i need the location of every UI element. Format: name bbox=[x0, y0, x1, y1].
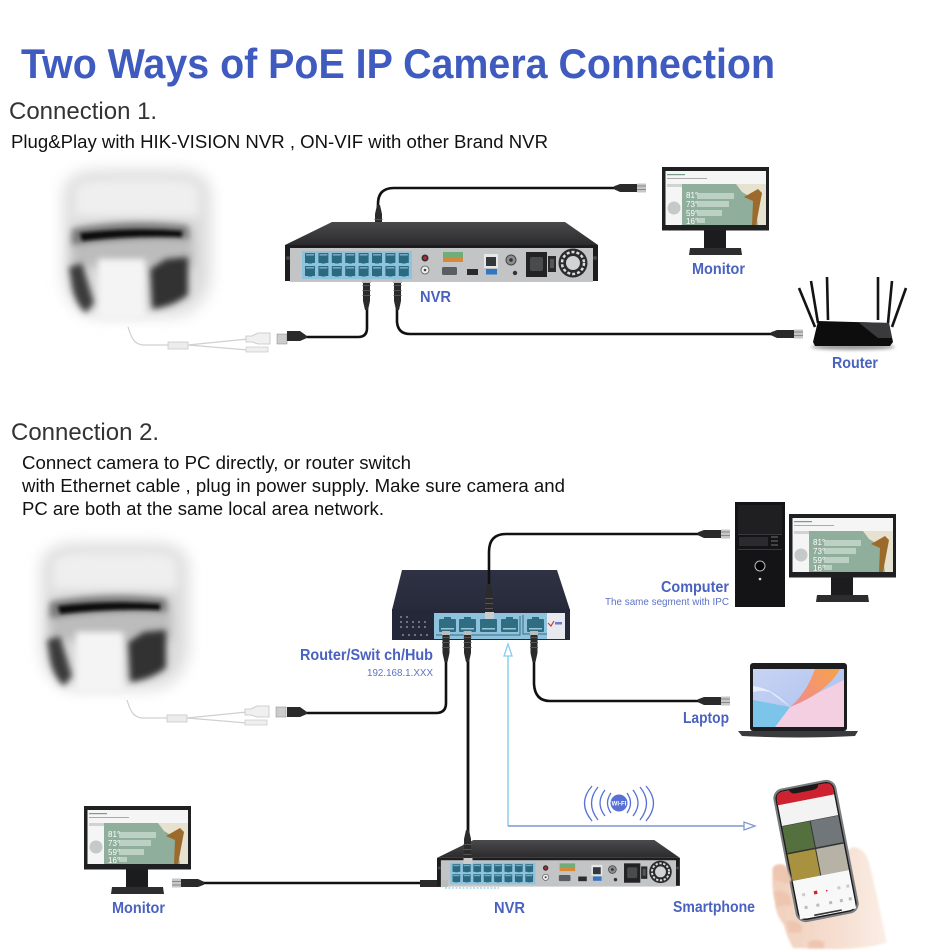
icon: laptop bbox=[738, 663, 858, 738]
cable: NVR to router bbox=[393, 279, 803, 338]
device: switch bbox=[392, 570, 570, 640]
label: laptop: Laptop bbox=[683, 710, 729, 727]
cable plug into NVR 2 bbox=[442, 830, 499, 888]
icon: hand holding smartphone bbox=[772, 778, 887, 949]
cable: switch to laptop bbox=[530, 631, 730, 706]
monitor: computer: 16° bbox=[813, 564, 825, 573]
pigtail cable 2 bbox=[127, 700, 307, 725]
label: router switch hub: 192.168.1.XXX bbox=[367, 667, 433, 679]
heading: connection 2: Connection 2. bbox=[11, 419, 159, 446]
monitor 3 bbox=[84, 806, 191, 894]
monitor 1 bbox=[662, 167, 769, 255]
monitor 3: 81° bbox=[108, 830, 120, 839]
text: connection 2 description bbox=[21, 452, 565, 519]
text: connection 2 description: PC are both at the same local area network. bbox=[22, 498, 384, 519]
cable: camera to switch bbox=[307, 631, 450, 713]
title: Two Ways of PoE IP Camera Connection bbox=[21, 40, 775, 87]
icon: computer tower bbox=[735, 502, 785, 607]
label: router switch hub: Router/Swit ch/Hub bbox=[300, 647, 433, 664]
icon: smartphone bbox=[772, 778, 860, 924]
camera 2 bbox=[42, 544, 188, 692]
pigtail cable 1 bbox=[128, 327, 307, 352]
camera 1 bbox=[64, 171, 210, 319]
label: NVR 2: NVR bbox=[494, 900, 525, 917]
monitor 3: 73° bbox=[108, 839, 120, 848]
arrow: wifi link from switch to smartphone bbox=[504, 644, 755, 830]
icon: router bbox=[799, 277, 906, 350]
monitor 1: 73° bbox=[686, 200, 698, 209]
label: computer: The same segment with IPC bbox=[605, 596, 729, 608]
monitor 3: 59° bbox=[108, 848, 120, 857]
cable: NVR to monitor 3 bbox=[172, 878, 441, 888]
label: computer: Computer bbox=[661, 579, 729, 596]
cable: camera to NVR bbox=[307, 279, 371, 337]
monitor 1: 59° bbox=[686, 209, 698, 218]
label: monitor 3: Monitor bbox=[112, 900, 165, 917]
monitor 1: 81° bbox=[686, 191, 698, 200]
label: router: Router bbox=[832, 355, 878, 372]
icon: wifi signal bbox=[584, 786, 654, 821]
monitor 1: 16° bbox=[686, 217, 698, 226]
text: connection 2 description: Connect camera to PC directly, or router switch bbox=[22, 452, 411, 473]
label: router switch hub bbox=[300, 647, 433, 679]
monitor: computer bbox=[789, 514, 896, 602]
text: connection 1 description: Plug&Play with HIK-VISION NVR , ON-VIF with other Brand NVR bbox=[11, 131, 548, 152]
label: computer bbox=[605, 579, 729, 608]
monitor: computer: 81° bbox=[813, 538, 825, 547]
label: NVR 1: NVR bbox=[420, 289, 451, 306]
monitor: computer: 73° bbox=[813, 547, 825, 556]
monitor 3: 16° bbox=[108, 856, 120, 865]
cable: switch to NVR bbox=[464, 631, 472, 840]
label: smartphone: Smartphone bbox=[673, 899, 755, 916]
device: NVR 1 bbox=[285, 222, 598, 282]
heading: connection 1: Connection 1. bbox=[9, 98, 157, 125]
cable: switch to computer bbox=[485, 530, 730, 619]
label: monitor 1: Monitor bbox=[692, 261, 745, 278]
monitor: computer: 59° bbox=[813, 556, 825, 565]
cable: NVR to monitor bbox=[374, 184, 646, 241]
text: connection 2 description: with Ethernet cable , plug in power supply. Make sure camera and bbox=[21, 475, 565, 496]
device: NVR 2 bbox=[437, 840, 680, 887]
icon: wifi signal: WI-FI bbox=[612, 802, 627, 808]
